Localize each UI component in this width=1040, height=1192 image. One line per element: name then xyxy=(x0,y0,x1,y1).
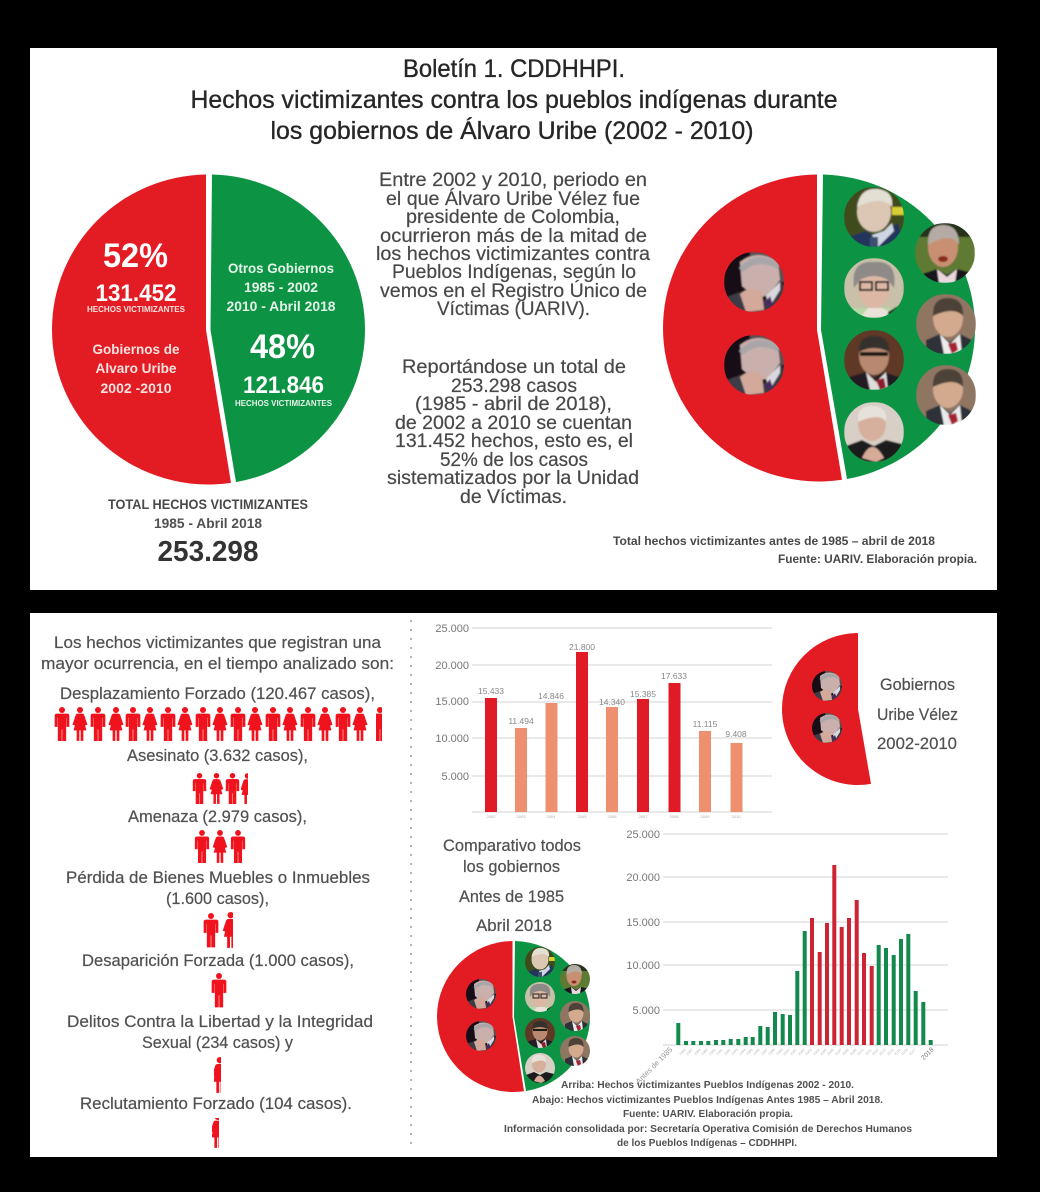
slice: Uribe governments xyxy=(52,174,231,485)
x axis labels: 1993 xyxy=(730,1048,739,1056)
category: Pérdida de Bienes xyxy=(66,869,370,947)
year labels: 2010 xyxy=(732,814,741,819)
x axis labels: 2002 xyxy=(797,1048,806,1056)
footer notes xyxy=(504,1079,912,1149)
text block: intro: Pueblos Indígenas, según lo xyxy=(392,262,636,283)
category: Reclutamiento Forzado xyxy=(80,1095,352,1148)
text block: totals xyxy=(387,357,639,508)
x axis labels: 1994 xyxy=(738,1048,747,1056)
text block: intro: el que Álvaro Uribe Vélez fue xyxy=(386,189,640,210)
x axis labels: 1999 xyxy=(775,1048,784,1056)
portraits: other presidents xyxy=(844,187,976,462)
y axis labels: 10.000 xyxy=(435,733,469,745)
source note: Total hechos victimizantes antes de 1985 – abril de 2018 xyxy=(613,536,936,548)
x axis labels: Antes de 1985 xyxy=(634,1045,674,1086)
x axis labels: 2010 xyxy=(856,1048,865,1056)
x axis labels: 2015 xyxy=(893,1048,902,1056)
x axis labels: 2006 xyxy=(826,1048,835,1056)
label: comparativo: los gobiernos xyxy=(463,858,560,876)
value labels: 11.115 xyxy=(693,719,718,729)
text block: totals: Reportándose un total de xyxy=(402,357,626,378)
category: Pérdida de Bienes: (1.600 casos), xyxy=(166,890,269,908)
y axis labels: 20.000 xyxy=(626,872,660,884)
x axis labels: 1989 xyxy=(700,1048,709,1056)
bar chart: all years xyxy=(626,829,948,1086)
slice: other governments xyxy=(210,174,365,482)
x axis labels: 2012 xyxy=(871,1048,880,1056)
x axis labels: 1996 xyxy=(752,1048,761,1056)
label: Gobiernos Uribe Vélez: Gobiernos xyxy=(880,676,955,694)
footer notes: Información consolidada por: Secretaría Operativa Comisión de Derechos Humanos xyxy=(504,1123,912,1135)
label: Gobiernos Uribe Vélez: Uribe Vélez xyxy=(877,706,958,724)
footer notes: Abajo: Hechos victimizantes Pueblos Indígenas Antes 1985 – Abril 2018. xyxy=(532,1094,883,1106)
label: 52% block: 52% xyxy=(103,237,168,275)
text block: totals: 131.452 hechos, esto es, el xyxy=(395,431,633,452)
label: 52% block: Gobiernos de xyxy=(92,342,180,357)
divider xyxy=(410,620,412,1150)
x axis labels: 2000 xyxy=(782,1048,791,1056)
x axis labels: 2013 xyxy=(878,1048,887,1056)
year labels: 2009 xyxy=(701,814,710,819)
category: Asesinato: Asesinato (3.632 casos), xyxy=(127,747,308,765)
x axis labels: 2008 xyxy=(841,1048,850,1056)
label: 48% block: Otros Gobiernos xyxy=(228,261,334,276)
x axis labels xyxy=(634,1045,936,1086)
intro text xyxy=(41,634,394,673)
bars: other governments, early xyxy=(676,931,807,1045)
value labels xyxy=(478,642,747,739)
value labels: 11.494 xyxy=(508,716,534,726)
label: comparativo: Antes de 1985 xyxy=(459,888,564,906)
panel: bottom detail xyxy=(30,613,997,1157)
label: 52% block xyxy=(87,237,186,396)
label: 48% block: HECHOS VICTIMIZANTES xyxy=(235,399,333,408)
text block: intro xyxy=(376,170,650,320)
text block: intro: Entre 2002 y 2010, periodo en xyxy=(379,170,647,191)
footer notes: de los Pueblos Indígenas – CDDHHPI. xyxy=(617,1137,797,1149)
year labels: 2004 xyxy=(547,814,556,819)
year labels: 2002 xyxy=(487,814,496,819)
label: 48% block: 2010 - Abril 2018 xyxy=(226,299,336,314)
x axis labels: 2001 xyxy=(789,1048,798,1056)
x axis labels: 2016 xyxy=(900,1048,909,1056)
label: 48% block: 121.846 xyxy=(243,372,324,399)
category: Reclutamiento Forzado: Reclutamiento Forzado (104 casos). xyxy=(80,1095,352,1113)
total figures xyxy=(108,496,308,568)
label: 48% block: 48% xyxy=(250,328,315,366)
x axis labels: 1986 xyxy=(678,1048,687,1056)
x axis labels: 1988 xyxy=(693,1048,702,1056)
text block: intro: vemos en el Registro Único de xyxy=(380,280,647,302)
y axis labels: 25.000 xyxy=(435,623,469,635)
y axis labels: 5.000 xyxy=(441,771,469,783)
x axis labels: 1995 xyxy=(745,1048,754,1056)
category: Amenaza xyxy=(128,808,307,863)
text block: totals: sistematizados por la Unidad xyxy=(387,468,639,489)
y axis labels xyxy=(626,829,660,1017)
footer notes: Arriba: Hechos victimizantes Pueblos Indígenas 2002 - 2010. xyxy=(561,1079,854,1091)
year labels: 2007 xyxy=(639,814,648,819)
category: Delitos Contra la Libertad: Sexual (234 casos) y xyxy=(142,1034,294,1052)
year labels xyxy=(487,814,741,819)
category: Desaparición Forzada: Desaparición Forzada (1.000 casos), xyxy=(82,952,354,970)
label: 48% block: 1985 - 2002 xyxy=(244,280,318,295)
label: 52% block: Alvaro Uribe xyxy=(96,361,177,376)
year labels: 2003 xyxy=(517,814,526,819)
pie chart: 52% vs 48% xyxy=(52,174,365,485)
x axis labels: 2007 xyxy=(834,1048,843,1056)
x axis labels: 1992 xyxy=(723,1048,732,1056)
x axis labels: 1991 xyxy=(715,1048,724,1056)
x axis labels: 2005 xyxy=(819,1048,828,1056)
text block: totals: de Víctimas. xyxy=(460,487,567,508)
y axis labels: 15.000 xyxy=(435,696,469,708)
value labels: 14.846 xyxy=(538,691,564,701)
label: Gobiernos Uribe Vélez: 2002-2010 xyxy=(877,735,957,753)
text block: intro: los hechos victimizantes contra xyxy=(376,244,650,265)
category: Delitos Contra la Libertad xyxy=(67,1013,373,1092)
bars: other governments, late xyxy=(877,934,933,1045)
text block: totals: 253.298 casos xyxy=(451,376,577,397)
category: Delitos Contra la Libertad: Delitos Contra la Libertad y la Integridad xyxy=(67,1013,373,1031)
source note xyxy=(613,536,977,566)
intro text: Los hechos victimizantes que registran una xyxy=(54,634,382,652)
value labels: 15.433 xyxy=(478,686,504,696)
footer notes: Fuente: UARIV. Elaboración propia. xyxy=(623,1108,793,1120)
text block: intro: presidente de Colombia, xyxy=(406,207,620,228)
pictogram row: 120.467 xyxy=(55,707,387,741)
source note: Fuente: UARIV. Elaboración propia. xyxy=(778,554,977,566)
title: Boletín 1. CDDHHPI. xyxy=(403,55,625,83)
x axis labels: 2009 xyxy=(849,1048,858,1056)
y axis labels: 20.000 xyxy=(435,660,469,672)
category: Pérdida de Bienes: Pérdida de Bienes Muebles o Inmuebles xyxy=(66,869,370,887)
text block: intro: ocurrieron más de la mitad de xyxy=(380,226,647,247)
x axis labels: 1987 xyxy=(685,1048,694,1056)
panel: top summary xyxy=(30,48,997,590)
bars: Uribe governments xyxy=(810,865,874,1045)
category: Asesinato xyxy=(127,747,308,804)
small pie with portraits xyxy=(437,941,590,1092)
x axis labels: 2011 xyxy=(865,1048,873,1056)
category: Desaparición Forzada xyxy=(82,952,354,1007)
text block: intro: Víctimas (UARIV). xyxy=(437,299,590,320)
year labels: 2005 xyxy=(578,814,587,819)
text block: totals: (1985 - abril de 2018), xyxy=(415,394,612,415)
y axis labels: 15.000 xyxy=(626,917,660,929)
label: comparativo xyxy=(443,837,581,935)
text block: totals: 52% de los casos xyxy=(440,450,588,471)
value labels: 21.800 xyxy=(569,642,595,652)
label: 48% block xyxy=(226,261,336,408)
x axis labels: 2017 xyxy=(908,1048,917,1056)
x axis labels: 2014 xyxy=(886,1048,895,1056)
portraits: Uribe xyxy=(724,252,784,395)
y axis labels: 25.000 xyxy=(626,829,660,841)
category: Amenaza: Amenaza (2.979 casos), xyxy=(128,808,307,826)
total figures: TOTAL HECHOS VICTIMIZANTES xyxy=(108,496,308,512)
y axis labels xyxy=(435,623,469,783)
bars xyxy=(485,652,742,812)
title xyxy=(190,55,838,145)
text block: totals: de 2002 a 2010 se cuentan xyxy=(395,413,632,434)
label: 52% block: 131.452 xyxy=(96,280,176,307)
value labels: 9.408 xyxy=(725,729,747,739)
title: Hechos victimizantes contra los pueblos indígenas durante xyxy=(190,86,838,114)
total figures: 253.298 xyxy=(158,536,258,568)
label: Gobiernos Uribe Vélez xyxy=(877,676,958,753)
x axis labels: 1997 xyxy=(760,1048,769,1056)
bar chart: 2002-2010 xyxy=(435,623,772,819)
year labels: 2006 xyxy=(608,814,617,819)
x axis labels: 2003 xyxy=(804,1048,813,1056)
year labels: 2008 xyxy=(670,814,679,819)
value labels: 14.340 xyxy=(599,697,625,707)
label: 52% block: HECHOS VICTIMIZANTES xyxy=(87,305,186,314)
category: Desplazamiento Forzado: Desplazamiento Forzado (120.467 casos), xyxy=(60,685,375,703)
x axis labels: 1990 xyxy=(708,1048,717,1056)
x axis labels: 2004 xyxy=(812,1048,821,1056)
title: los gobiernos de Álvaro Uribe (2002 - 2010) xyxy=(270,116,754,145)
label: comparativo: Abril 2018 xyxy=(476,917,552,935)
y axis labels: 10.000 xyxy=(626,960,660,972)
total figures: 1985 - Abril 2018 xyxy=(154,516,263,531)
y axis labels: 5.000 xyxy=(632,1005,660,1017)
label: comparativo: Comparativo todos xyxy=(443,837,581,855)
value labels: 15.385 xyxy=(630,689,656,699)
x axis labels: 2018 xyxy=(920,1046,936,1062)
value labels: 17.633 xyxy=(661,671,687,681)
intro text: mayor ocurrencia, en el tiempo analizado son: xyxy=(41,655,394,673)
label: 52% block: 2002 -2010 xyxy=(100,381,172,396)
category: Desplazamiento Forzado xyxy=(55,685,387,741)
icon: half pie Uribe xyxy=(782,633,871,785)
x axis labels: 1998 xyxy=(767,1048,776,1056)
pie chart with portraits xyxy=(663,174,976,481)
